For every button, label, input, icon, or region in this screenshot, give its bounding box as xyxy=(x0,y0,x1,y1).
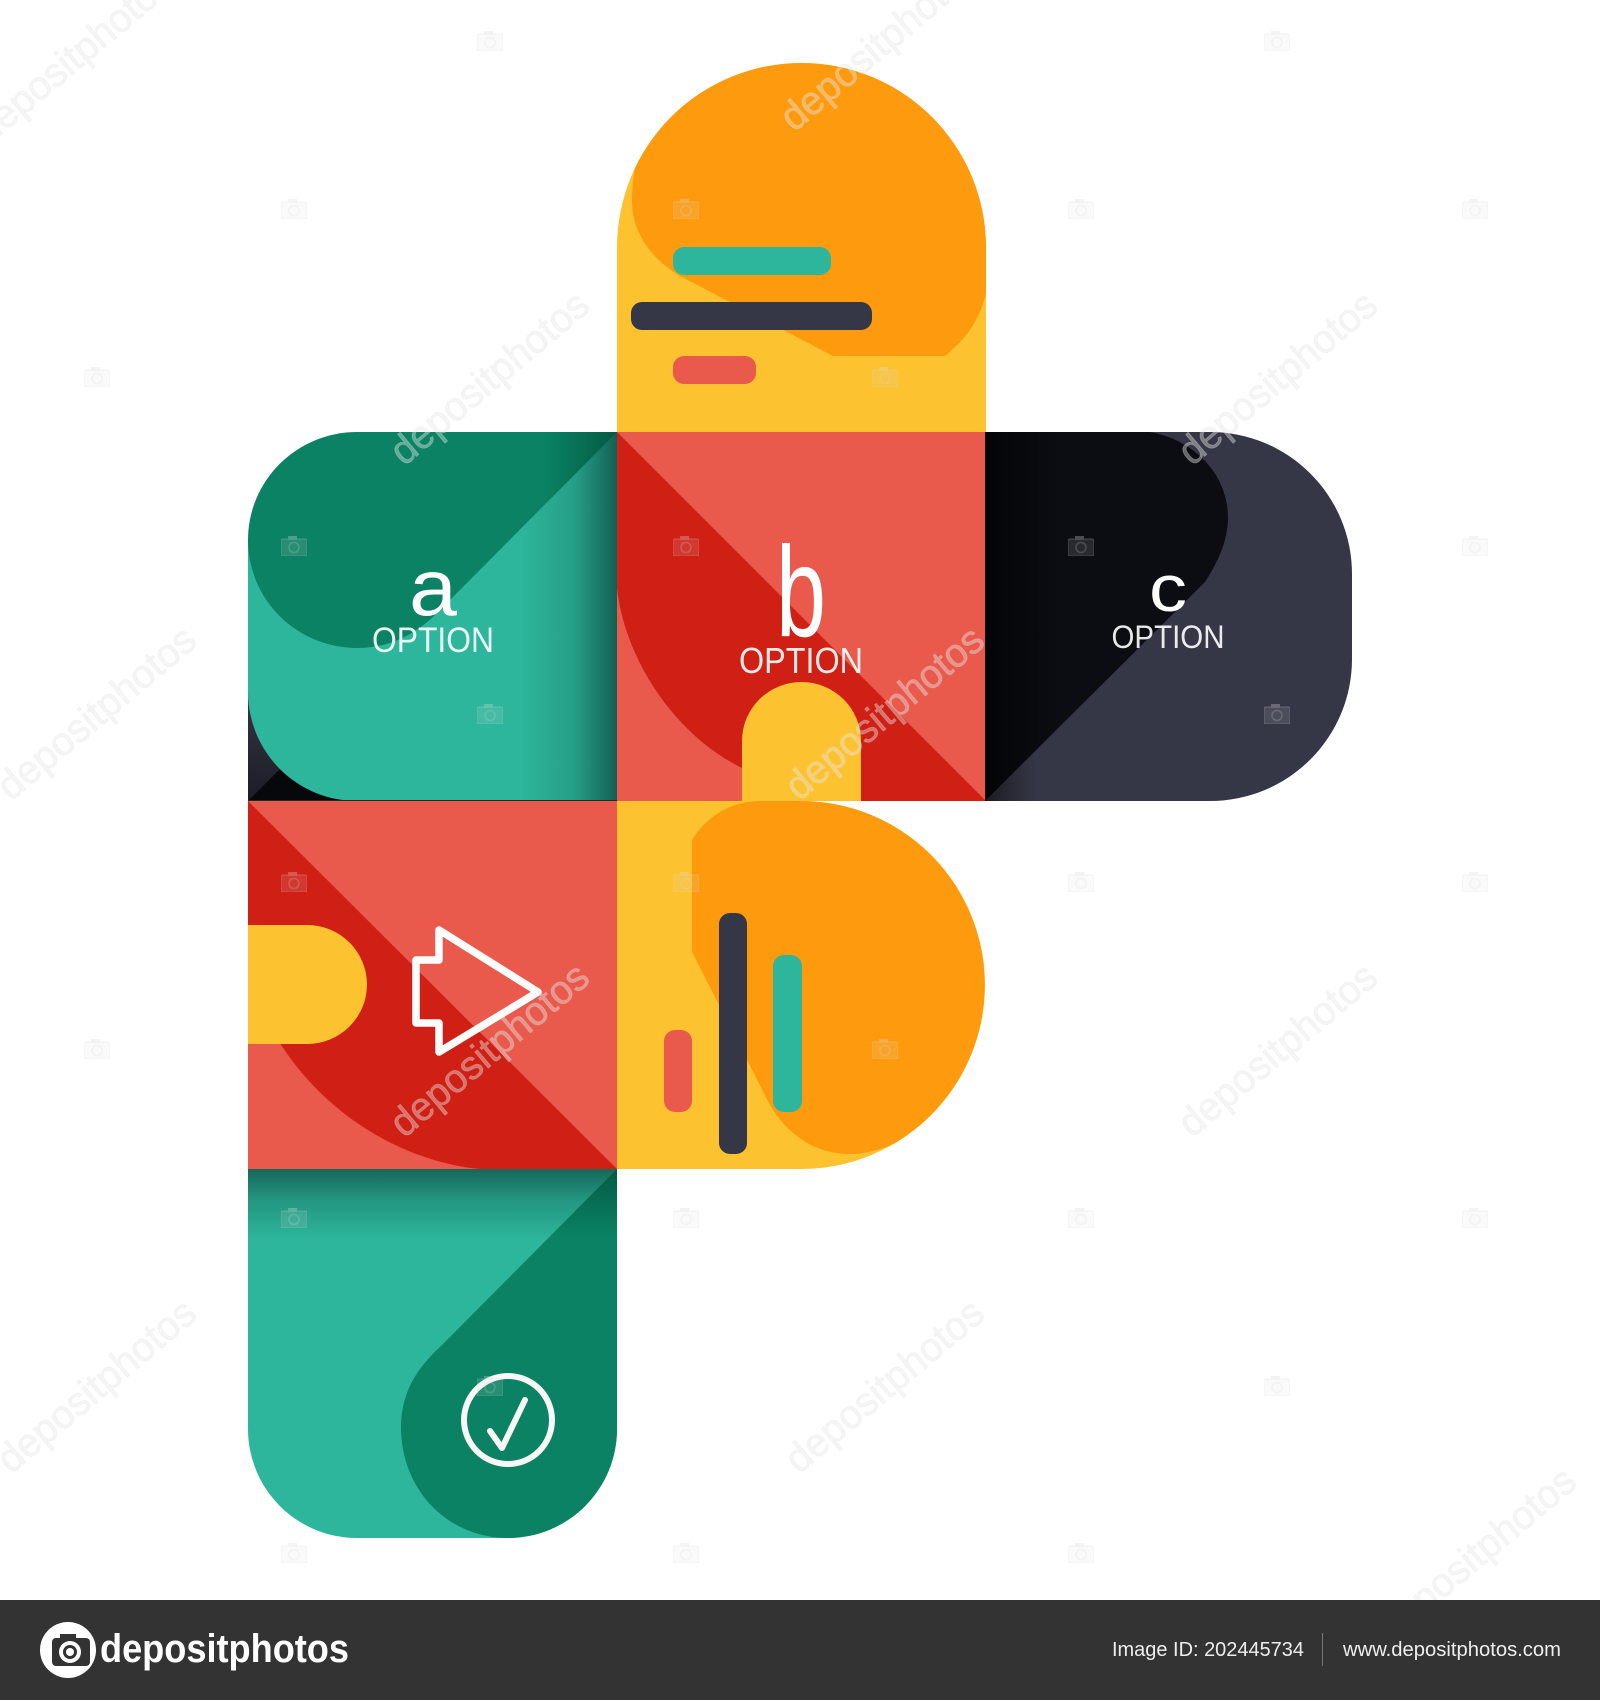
bar: dark xyxy=(719,913,747,1154)
dark green fold xyxy=(401,1169,617,1538)
watermark: depositphotos xyxy=(1170,282,1386,474)
letter c: c xyxy=(1149,551,1187,625)
watermark: depositphotos xyxy=(382,954,598,1146)
label OPTION: OPTION xyxy=(739,640,863,681)
list line: red xyxy=(673,356,756,384)
dark green fold xyxy=(248,432,617,648)
watermark: depositphotos xyxy=(382,282,598,474)
panel: option c xyxy=(985,432,1352,801)
yellow tab xyxy=(248,925,367,1044)
website url: www.depositphotos.com xyxy=(1342,1639,1561,1661)
label OPTION: OPTION xyxy=(372,621,494,660)
footer bar xyxy=(0,1600,1600,1700)
image id: Image ID: 202445734 xyxy=(1112,1639,1304,1661)
watermark: depositphotos xyxy=(777,617,993,809)
logo text: depositphotos xyxy=(100,1627,349,1671)
orange blob xyxy=(692,801,985,1154)
list line: dark xyxy=(631,302,872,330)
label OPTION: OPTION xyxy=(1112,619,1224,655)
orange blob xyxy=(632,63,986,356)
panel: option a xyxy=(248,432,617,802)
panel: arrow xyxy=(248,801,617,1169)
teal face xyxy=(248,432,617,801)
dark red fold xyxy=(617,432,986,801)
panel: top yellow dome xyxy=(617,63,986,432)
bar: teal xyxy=(773,955,802,1112)
panel: bar chart xyxy=(617,801,985,1169)
list line: teal xyxy=(673,247,831,275)
icon: check in circle xyxy=(464,1376,552,1464)
panel: option b xyxy=(617,432,986,801)
black fold xyxy=(985,432,1228,801)
bar: red xyxy=(664,1030,692,1112)
panel: check xyxy=(248,1169,617,1538)
watermark: depositphotos xyxy=(1369,1458,1585,1650)
icon: arrow outline xyxy=(416,930,538,1052)
letter b: b xyxy=(776,521,826,664)
watermark: depositphotos xyxy=(1170,954,1386,1146)
yellow tab xyxy=(742,682,861,801)
logo icon: camera xyxy=(40,1622,96,1678)
watermark: depositphotos xyxy=(777,1290,993,1482)
letter a: a xyxy=(409,543,458,632)
dark red fold xyxy=(248,801,617,1169)
